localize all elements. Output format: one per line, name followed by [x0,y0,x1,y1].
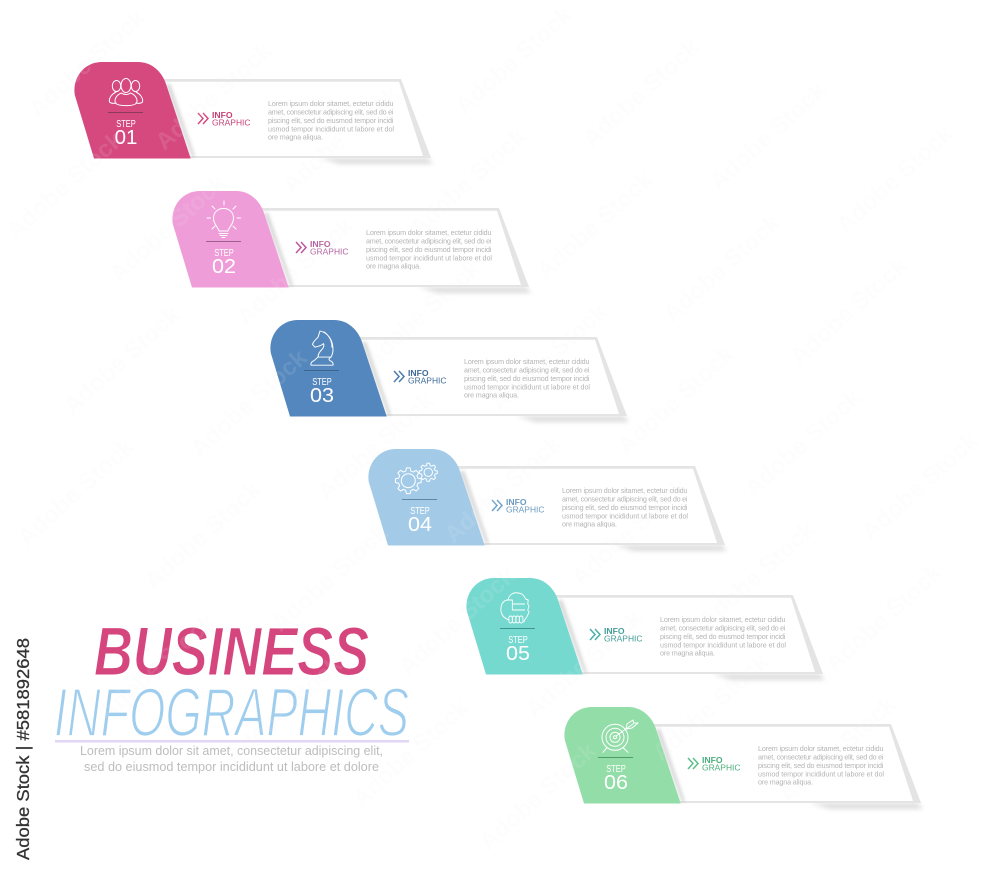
text block 2: Lorem ipsum dolor sitamet, ectetur cididu [366,228,492,237]
panel: step 3 card [356,337,629,422]
arrow: chevrons 1 [198,113,208,124]
subtitle text: sed do eiusmod tempor incididunt ut labore et dolore [84,759,379,774]
watermark layer: Adobe Stock [347,694,475,813]
divider and step label 03 [304,370,339,407]
title: infographics: INFOGRAPHICS [54,674,409,751]
divider and step label 03: 03 [310,384,334,407]
tab: step 6 [564,707,681,804]
text block 6: ore magna aliqua. [758,778,813,786]
text block 2: amet, consectetur adipiscing elit, sed do ei [366,236,492,246]
step 4 [368,449,727,551]
info graphic label 3 [408,368,446,386]
watermark layer: Adobe Stock [785,252,913,371]
watermark layer: Adobe Stock [693,516,821,635]
divider and step label 04: 04 [408,513,432,536]
info graphic label 6: INFO [702,755,723,765]
info graphic label 6 [702,755,740,772]
text block 3: ore magna aliqua. [464,390,519,400]
step 6 [564,707,923,809]
divider and step label 05 [500,628,535,665]
watermark layer: Adobe Stock [739,384,867,503]
text block 5: Lorem ipsum dolor sitamet, ectetur cididu [660,615,786,624]
icon: chess knight [311,331,333,365]
stock credit vertical text: Adobe Stock | #581892648 [13,638,33,860]
info graphic label 2 [310,239,348,256]
text block 6: piscing elit, sed do eiusmod tempor incidi [758,761,884,770]
step 2 [172,191,531,293]
watermark layer: Adobe Stock [612,341,740,460]
divider and step label 06: 06 [604,771,628,794]
info graphic label 5: GRAPHIC [604,634,642,644]
text block 3: amet, consectetur adipiscing elit, sed do ei [464,366,590,374]
text block 5: ore magna aliqua. [660,648,715,658]
text block 6 [758,744,884,786]
info graphic label 1: INFO [212,110,233,120]
info graphic label 4: INFO [506,497,527,507]
info graphic label 4 [506,497,544,514]
arrow: chevrons 3 [394,371,404,382]
text block 5: amet, consectetur adipiscing elit, sed do ei [660,624,786,632]
info graphic label 5 [604,626,642,644]
watermark layer: Adobe Stock [485,298,613,417]
text block 5: usmod tempor incididunt ut labore et dol [660,640,786,650]
info graphic label 3: INFO [408,368,429,378]
watermark layer: Adobe Stock [474,737,602,856]
text block 6: amet, consectetur adipiscing elit, sed do ei [758,752,884,762]
text block 4: piscing elit, sed do eiusmod tempor incidi [562,503,688,512]
text block 1: ore magna aliqua. [268,132,323,142]
info graphic label 1 [212,110,250,128]
watermark layer: Adobe Stock [139,476,267,595]
watermark layer: Adobe Stock [531,166,659,285]
text block 4: ore magna aliqua. [562,520,617,528]
watermark layer: Adobe Stock [774,691,902,810]
text block 4: Lorem ipsum dolor sitamet, ectetur cididu [562,486,688,495]
info graphic label 2: GRAPHIC [310,246,348,256]
info graphic label 6: GRAPHIC [702,762,740,772]
text block 1 [268,99,394,142]
info graphic label 3: GRAPHIC [408,376,446,386]
tab: step 5 [466,578,583,674]
step 3 [270,320,629,422]
watermark layer: Adobe Stock [856,427,984,546]
icon: handshake fist [501,593,529,623]
info graphic label 5: INFO [604,626,625,636]
subtitle text: Lorem ipsum dolor sit amet, consectetur adipiscing elit, [80,743,383,758]
arrow: chevrons 6 [688,758,698,769]
panel: step 2 card [258,208,531,293]
watermark layer: Adobe Stock [12,433,140,552]
arrow: chevrons 5 [590,629,600,640]
divider and step label 01: STEP [116,118,136,130]
info graphic label 2: INFO [310,239,331,249]
watermark layer: Adobe Stock [58,301,186,420]
watermark layer: Adobe Stock [647,648,775,767]
watermark layer: Adobe Stock [404,123,532,242]
divider and step label 03: STEP [312,376,332,388]
divider and step label 06 [598,758,633,794]
watermark layer: Adobe Stock [277,80,405,199]
watermark layer: Adobe Stock [312,387,440,506]
text block 3: piscing elit, sed do eiusmod tempor incidi [464,374,590,383]
watermark layer: Adobe Stock [704,77,832,196]
divider and step label 02: 02 [212,255,236,278]
watermark layer: Adobe Stock [831,120,959,239]
text block 2: usmod tempor incididunt ut labore et dol [366,254,492,262]
watermark layer: Adobe Stock [185,344,313,463]
icon: target with arrow [602,720,638,752]
text block 5: piscing elit, sed do eiusmod tempor incidi [660,632,786,641]
divider and step label 04 [402,500,437,536]
step 1 [74,62,433,164]
arrow: chevrons 2 [296,242,306,253]
text block 4: amet, consectetur adipiscing elit, sed do ei [562,494,688,504]
divider and step label 01: 01 [115,126,137,149]
text block 6: usmod tempor incididunt ut labore et dol [758,770,884,778]
watermark layer: Adobe Stock [520,605,648,724]
watermark layer: Adobe Stock [439,430,567,549]
arrow: chevrons 4 [492,500,502,511]
text block 1: piscing elit, sed do eiusmod tempor incidi [268,116,394,125]
divider and step label 05: STEP [508,634,528,646]
tab: step 2 [172,191,289,288]
text block 5 [660,615,786,658]
text block 2: ore magna aliqua. [366,262,421,270]
text block 2: piscing elit, sed do eiusmod tempor incidi [366,245,492,254]
text block 2 [366,228,492,270]
text block 4 [562,486,688,528]
watermark layer: Adobe Stock [150,37,278,156]
watermark layer: Adobe Stock [104,169,232,288]
panel: step 1 card [160,79,433,164]
watermark layer: Adobe Stock [566,473,694,592]
icon: light bulb [207,201,240,238]
watermark layer: Adobe Stock [358,255,486,374]
text block 1: usmod tempor incididunt ut labore et dol [268,124,394,134]
text block 6: Lorem ipsum dolor sitamet, ectetur cididu [758,744,884,753]
tab: step 1 [74,62,191,158]
watermark layer: Adobe Stock [93,608,221,727]
watermark layer: Adobe Stock [23,4,151,123]
step 5 [466,578,825,680]
text block 4: usmod tempor incididunt ut labore et dol [562,512,688,520]
watermark layer: Adobe Stock [266,519,394,638]
panel: step 6 card [650,724,923,809]
panel: step 4 card [454,466,727,551]
text block 3: Lorem ipsum dolor sitamet, ectetur cididu [464,357,590,366]
divider and step label 02: STEP [214,247,234,259]
title underline [55,740,409,742]
text block 1: amet, consectetur adipiscing elit, sed do ei [268,108,394,116]
divider and step label 01 [108,112,143,149]
info graphic label 1: GRAPHIC [212,118,250,128]
divider and step label 02 [206,242,241,278]
tab: step 4 [368,449,485,546]
title: business: BUSINESS [94,613,369,690]
divider and step label 04: STEP [410,505,430,517]
watermark layer: Adobe Stock [450,1,578,120]
icon: team [109,78,143,106]
text block 1: Lorem ipsum dolor sitamet, ectetur cididu [268,99,394,108]
info graphic label 4: GRAPHIC [506,504,544,514]
divider and step label 06: STEP [606,763,626,775]
text block 3 [464,357,590,400]
text block 3: usmod tempor incididunt ut labore et dol [464,382,590,392]
watermark layer: Adobe Stock [658,209,786,328]
subtitle text [80,743,383,774]
watermark layer: Adobe Stock [577,34,705,153]
watermark layer: Adobe Stock [1,126,129,245]
divider and step label 05: 05 [506,642,530,665]
watermark layer: Adobe Stock [820,559,948,678]
watermark layer: Adobe Stock [393,562,521,681]
panel: step 5 card [552,595,825,680]
watermark layer: Adobe Stock [231,212,359,331]
watermark layer: Adobe Stock [220,651,348,770]
tab: step 3 [270,320,387,416]
icon: gears [395,463,437,494]
